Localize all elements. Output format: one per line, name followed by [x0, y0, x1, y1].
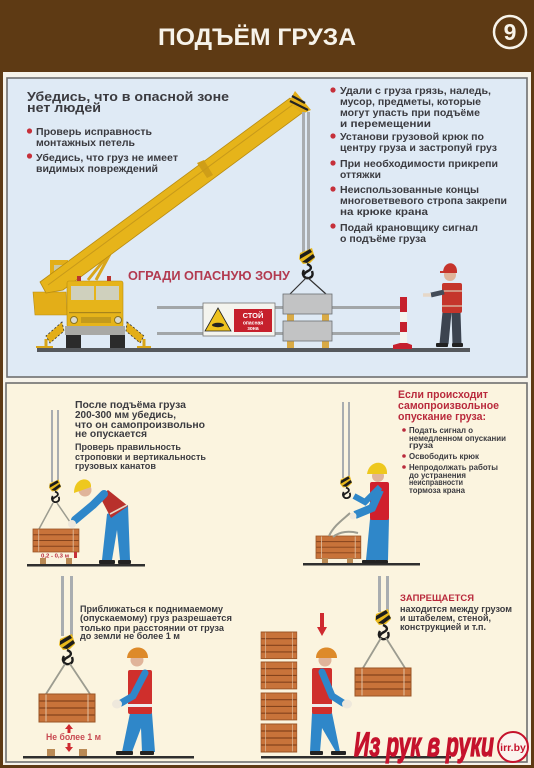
- hook and crate: [33, 410, 79, 564]
- ground: [23, 756, 194, 758]
- truck cab: [67, 281, 123, 327]
- text: after lifting: грузовых канатов: [75, 461, 156, 471]
- text: check the danger zone: монтажных петель: [36, 138, 135, 149]
- panel: lifting rules: [6, 383, 527, 762]
- hook and crate: 0,2 - 0,3 м: [41, 554, 69, 560]
- text: after lifting: Проверь правильность: [75, 442, 181, 452]
- text: if spontaneous lowering: тормоза крана: [409, 486, 466, 495]
- text: check the danger zone: [27, 89, 229, 175]
- warning sign: СТОЙ: [243, 311, 263, 320]
- boom tip: [289, 91, 311, 114]
- hook and ropes: [340, 402, 352, 498]
- panel background: [7, 78, 527, 377]
- height limit label: [46, 724, 101, 756]
- text: after lifting: что он самопроизвольно: [75, 419, 205, 431]
- stack of crates: [261, 632, 297, 752]
- text: preparation checklist: [330, 85, 507, 245]
- text: preparation checklist: Неиспользованные концы: [340, 184, 479, 196]
- worker walking: [112, 648, 155, 755]
- text: after lifting: После подъёма груза: [75, 399, 186, 411]
- warning sign: зона: [247, 326, 259, 332]
- text: if spontaneous lowering: Если происходит: [398, 389, 489, 401]
- text: if spontaneous lowering: самопроизвольное: [398, 400, 499, 412]
- crane ropes and hook: [290, 112, 326, 294]
- hook and crate: [39, 576, 95, 722]
- text: check the danger zone: Убедись, что в опасной зоне: [27, 89, 229, 104]
- ground line: [37, 348, 470, 352]
- text: if spontaneous lowering: до устранения: [409, 471, 466, 480]
- text: approach rule: (опускаемому) груз разрешается: [80, 613, 232, 624]
- text: after lifting: не опускается: [75, 428, 147, 440]
- worker standing: [350, 463, 389, 564]
- scene: spontaneous lowering: [303, 389, 506, 566]
- crane: [33, 91, 311, 348]
- text: approach rule: [80, 604, 232, 642]
- text: if spontaneous lowering: немедленном опускании: [409, 434, 506, 443]
- text: preparation checklist: о подъёме груза: [340, 233, 426, 245]
- text: if spontaneous lowering: опускание груза:: [398, 411, 486, 423]
- worker between load and stack: [310, 648, 352, 755]
- text: preparation checklist: центру груза и застропуй груз: [340, 142, 497, 154]
- text: forbidden: ЗАПРЕЩАЕТСЯ: [400, 593, 474, 604]
- text: after lifting: [75, 399, 206, 471]
- text: forbidden: [400, 593, 512, 633]
- text: if spontaneous lowering: Непродолжать работы: [409, 463, 498, 472]
- outriggers: [46, 322, 64, 343]
- callout: fence off the danger zone: ОГРАДИ ОПАСНУЮ ЗОНУ: [128, 269, 290, 283]
- text: preparation checklist: мусор, предметы, которые: [340, 96, 481, 108]
- text: after lifting: строповки и вертикальность: [75, 452, 206, 462]
- rear cabin: [50, 260, 68, 278]
- concrete slabs load: [283, 294, 332, 348]
- height limit label: Не более 1 м: [46, 732, 101, 742]
- ground: [27, 564, 145, 566]
- text: approach rule: только при расстоянии от груза: [80, 623, 225, 634]
- ground: [261, 756, 451, 758]
- text: preparation checklist: на крюке крана: [340, 206, 428, 218]
- text: forbidden: находится между грузом: [400, 604, 512, 615]
- worker bending: [68, 479, 131, 564]
- text: preparation checklist: многоветвевого стропа закрепи: [340, 195, 507, 207]
- text: if spontaneous lowering: [398, 389, 506, 495]
- boom struts: [88, 250, 112, 280]
- scene: approach limit: [23, 576, 232, 758]
- scene: checking after lift: [27, 399, 206, 566]
- counterweight box: [33, 292, 67, 315]
- barrier post: [393, 297, 412, 349]
- text: preparation checklist: Установи грузовой крюк по: [340, 131, 484, 143]
- text: check the danger zone: Проверь исправность: [36, 127, 152, 138]
- ground: [303, 563, 420, 566]
- panel: crane lifting scene: [7, 78, 527, 377]
- warning sign: опасная: [243, 320, 263, 326]
- text: approach rule: до земли не более 1 м: [80, 631, 180, 642]
- text: if spontaneous lowering: Подать сигнал о: [409, 426, 473, 435]
- text: after lifting: 200-300 мм убедись,: [75, 409, 176, 421]
- fence rails: [157, 306, 400, 335]
- icon: sheet number 9: [494, 16, 526, 48]
- text: if spontaneous lowering: неисправности: [409, 478, 463, 487]
- text: preparation checklist: При необходимости прикрепи: [340, 158, 498, 170]
- text: preparation checklist: оттяжки: [340, 169, 381, 181]
- text: if spontaneous lowering: груза: [409, 441, 434, 450]
- text: preparation checklist: могут упасть при подъёме: [340, 107, 480, 119]
- text: preparation checklist: и перемещении: [340, 118, 431, 130]
- text: check the danger zone: нет людей: [27, 100, 101, 115]
- text: forbidden: и штабелем, стеной,: [400, 613, 491, 624]
- signalling worker: [423, 263, 463, 347]
- text: approach rule: Приближаться к поднимаемому: [80, 604, 224, 615]
- crate with loose sling: [316, 513, 361, 563]
- bumper and wheels: [65, 326, 125, 335]
- text: preparation checklist: Подай крановщику сигнал: [340, 222, 478, 234]
- headlights and grille: [70, 316, 78, 324]
- title: ПОДЪЁМ ГРУЗА: [158, 24, 356, 51]
- boom: [40, 98, 302, 293]
- red arrow: [317, 613, 327, 636]
- watermark: Из рук в руки: irr.by: [500, 742, 526, 754]
- text: preparation checklist: Удали с груза грязь, наледь,: [340, 85, 491, 97]
- icon: sheet number 9: 9: [504, 19, 516, 45]
- scene: forbidden zone: [261, 576, 512, 758]
- text: check the danger zone: видимых повреждений: [36, 164, 158, 175]
- warning sign: [203, 303, 275, 336]
- text: forbidden: конструкцией и т.п.: [400, 622, 486, 633]
- hook and crate: [355, 576, 411, 696]
- text: if spontaneous lowering: Освободить крюк: [409, 452, 480, 461]
- panel background: [6, 383, 527, 762]
- text: check the danger zone: Убедись, что груз не имеет: [36, 152, 178, 164]
